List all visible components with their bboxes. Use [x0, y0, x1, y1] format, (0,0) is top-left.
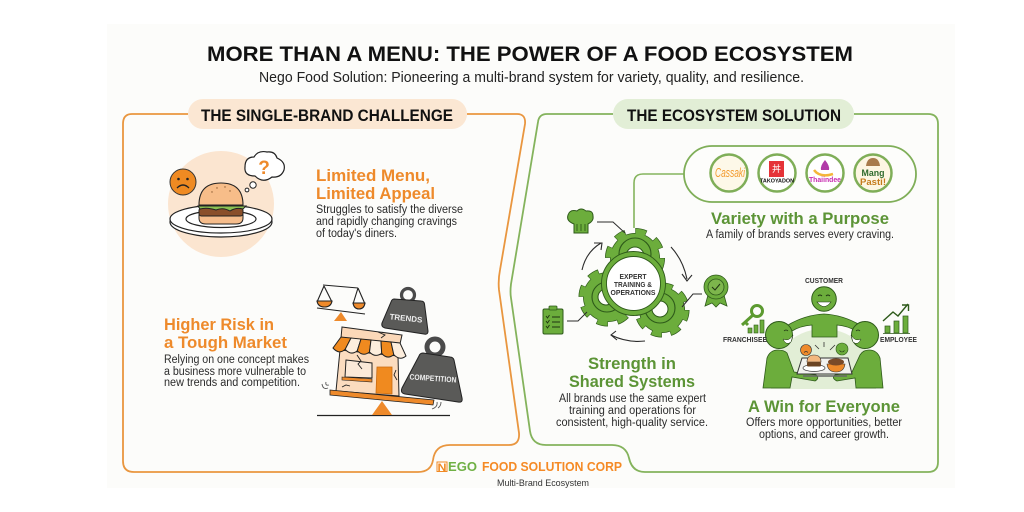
heading: strength in shared systems: Shared Systems: [569, 372, 695, 391]
heading: higher risk: a Tough Market: [164, 333, 287, 352]
logo: Cassaki: [710, 154, 748, 192]
centre ring with label: TRAINING &: [614, 282, 652, 289]
text: higher risk description: [164, 354, 309, 389]
panel outline: orange: [123, 114, 525, 472]
icon: trends weight: [382, 288, 428, 334]
company logo: EGO: [448, 460, 477, 474]
centre ring with label: OPERATIONS: [610, 290, 656, 297]
icon: key and bars: [742, 306, 764, 333]
logo: Mang Pasti: [854, 154, 892, 192]
text: higher risk description: a business more vulnerable to: [164, 366, 306, 378]
reaction faces: [800, 342, 848, 356]
tray with food: [797, 355, 852, 376]
heading: variety with a purpose: Variety with a Purpose: [711, 209, 889, 228]
logo: Cassaki: Cassaki: [715, 166, 746, 180]
title: MORE THAN A MENU: THE POWER OF A FOOD ECOSYSTEM: [207, 43, 853, 66]
logo: Takoyadon: 丼: [772, 163, 781, 174]
text: higher risk description: Relying on one concept makes: [164, 354, 309, 366]
gear: right: [638, 286, 686, 334]
centre ring with label: [602, 252, 666, 316]
icon: competition weight: COMPETITION: [409, 372, 457, 385]
text: limited menu description: and rapidly changing cravings: [316, 216, 457, 228]
label: employee: EMPLOYEE: [880, 337, 917, 344]
text: shared systems description: consistent, high-quality service.: [556, 417, 708, 429]
text: variety description: A family of brands serves every craving.: [706, 229, 894, 241]
icon: burger on plate with sad face and question: ?: [258, 158, 270, 179]
icon: clipboard checklist: [543, 306, 587, 334]
logo: Mang Pasti: Pasti!: [860, 177, 886, 188]
text: limited menu description: [316, 204, 463, 240]
heading: limited menu: Limited Appeal: [316, 184, 435, 203]
logo: Takoyadon: TAKOYADON: [760, 178, 794, 184]
logo: Thaiindee: [806, 154, 844, 192]
company logo: N: [438, 462, 447, 474]
icon: competition weight: [401, 339, 462, 402]
heading: higher risk: [164, 315, 287, 352]
icon: trends weight: TRENDS: [389, 312, 423, 325]
heading: strength in shared systems: [569, 354, 695, 391]
text: win description: [746, 417, 902, 441]
text: win description: Offers more opportunities, better: [746, 417, 902, 429]
heading: a win for everyone: A Win for Everyone: [748, 397, 900, 416]
text: shared systems description: training and operations for: [569, 405, 696, 417]
company logo: FOOD SOLUTION CORP: [482, 460, 622, 474]
icon: small balance scale: [317, 285, 365, 321]
icon: burger on plate with sad face and question: [168, 151, 284, 257]
text: limited menu description: of today's diners.: [316, 228, 397, 240]
heading: limited menu: [316, 166, 435, 203]
logo: Mang Pasti: Mang: [862, 168, 885, 179]
brand pill with four logos: [684, 146, 916, 202]
subtitle: Nego Food Solution: Pioneering a multi-brand system for variety, quality, and resilience.: [259, 70, 804, 86]
centre ring with label: EXPERT: [620, 274, 647, 281]
logo: Thaiindee: Thaiindee: [809, 177, 841, 184]
icon: growth chart: [883, 304, 910, 334]
text: shared systems description: [556, 393, 708, 429]
text: limited menu description: Struggles to satisfy the diverse: [316, 204, 463, 216]
icon: storefront on tipping plank: [317, 327, 450, 416]
employee: [833, 322, 883, 388]
franchisee: [763, 322, 818, 388]
text: win description: options, and career growth.: [759, 429, 889, 441]
label: franchisee: FRANCHISEE: [723, 337, 767, 344]
logo tagline: Multi-Brand Ecosystem: [497, 478, 589, 489]
gear: top: [608, 232, 662, 284]
icon: chef hat: [568, 209, 625, 233]
heading: limited menu: Limited Menu,: [316, 166, 430, 185]
customer: [788, 287, 860, 337]
cycle arrows: [582, 243, 692, 341]
heading pill: the ecosystem solution: THE ECOSYSTEM SOLUTION: [627, 107, 841, 125]
heading: higher risk: Higher Risk in: [164, 315, 274, 334]
heading: strength in shared systems: Strength in: [588, 354, 676, 373]
logo: Takoyadon: [758, 154, 796, 192]
panel: single-brand challenge: [123, 99, 525, 472]
label: customer: CUSTOMER: [805, 278, 843, 285]
gear: left: [582, 271, 634, 323]
storefront: [333, 327, 406, 396]
diagram: win for everyone people: [763, 287, 883, 389]
heading pill: the ecosystem solution: [613, 99, 854, 129]
icon: quality badge: [682, 275, 728, 307]
diagram: interlocking gears: [582, 232, 692, 341]
heading pill: the single-brand challenge: [188, 99, 467, 129]
text: higher risk description: new trends and competition.: [164, 377, 300, 389]
connector: brands to gears: [634, 174, 684, 228]
heading pill: the single-brand challenge: THE SINGLE-BRAND CHALLENGE: [201, 107, 453, 125]
text: shared systems description: All brands use the same expert: [559, 393, 707, 405]
panel outline: green: [510, 114, 938, 472]
panel: ecosystem solution: [510, 99, 938, 472]
